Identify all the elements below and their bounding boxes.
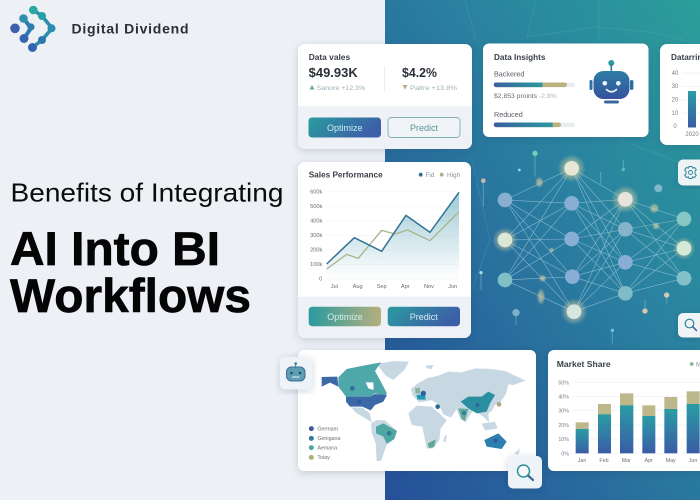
line chart: 0 [319, 277, 322, 283]
bar chart: 20 [672, 98, 679, 104]
bar chart: 30 [672, 84, 679, 90]
stacked bar chart: 50% [558, 380, 569, 386]
stacked bar chart: Jun [689, 458, 697, 464]
button: optimize: Optimize [327, 312, 363, 322]
bar chart: 0 [673, 124, 677, 130]
metric: percentage [402, 66, 457, 92]
progress: backered: Backered [494, 70, 524, 78]
stacked bar chart: Jan [578, 458, 586, 464]
chart legend: High [447, 172, 461, 179]
line chart [310, 189, 459, 290]
line chart: Jun [448, 284, 457, 290]
chart legend: Fid [426, 172, 435, 179]
stacked bar chart: 10% [558, 437, 569, 443]
progress: reduced [494, 110, 575, 127]
icon: gear card [678, 160, 700, 186]
heading: main title [10, 222, 251, 322]
panel: world map [298, 350, 536, 471]
heading: main title: Workflows [10, 269, 251, 322]
panel: data insights [483, 44, 648, 137]
button: predict [388, 118, 460, 138]
chart legend [690, 361, 700, 368]
stacked bar chart: Apr [645, 458, 653, 464]
panel: data timeline [660, 44, 700, 145]
floating particles [479, 151, 669, 343]
stacked bar chart [558, 380, 700, 464]
line chart: 200k [310, 248, 323, 254]
highlighted countries [322, 362, 507, 449]
stacked bar chart: 30% [558, 409, 569, 415]
button: predict: Predict [410, 123, 439, 133]
chart legend [419, 172, 461, 179]
panel: market share [548, 350, 700, 471]
map legend: Aemana [317, 445, 337, 451]
stacked bar chart: Feb [599, 458, 609, 464]
button: predict: Predict [410, 312, 438, 322]
stacked bar chart: Mar [622, 458, 631, 464]
metric: sales value [309, 66, 365, 92]
bar chart: 2020 [685, 132, 699, 138]
progress: backered: $2,853 proints -2.8% [494, 93, 557, 100]
line chart: 500k [310, 204, 323, 210]
logo [10, 6, 189, 52]
line chart: 600k [310, 189, 323, 195]
line chart: 400k [310, 218, 323, 224]
icon: robot card [280, 357, 312, 390]
world map [309, 361, 526, 461]
icon: magnifier card [508, 456, 542, 488]
metric: sales value: $49.93K [309, 66, 358, 80]
progress: backered [494, 70, 575, 100]
background: light left side [0, 0, 385, 500]
neural network [479, 151, 695, 343]
line chart: Nov [424, 284, 434, 290]
button: optimize [309, 307, 381, 326]
network nodes [492, 154, 695, 325]
metric: percentage: Paitre +13.8% [410, 85, 457, 92]
panel title: Sales Performance [309, 170, 383, 180]
button: predict [388, 307, 460, 326]
panel title: Market Share [557, 359, 611, 369]
background: blue-teal right side [385, 0, 700, 500]
map legend: Germam [317, 426, 339, 432]
panel title: Data Insights [494, 53, 546, 62]
logo mark [10, 6, 55, 52]
panel: sales performance [298, 162, 471, 338]
line chart: Apr [401, 284, 410, 290]
continents [351, 361, 526, 461]
bar chart: 10 [672, 111, 679, 117]
panel: data values [298, 44, 472, 149]
progress: reduced: Reduced [494, 110, 523, 119]
icon: robot [590, 60, 633, 104]
heading: main title: AI Into BI [10, 222, 220, 275]
stacked bar chart: 0% [561, 451, 569, 457]
metric: percentage: $4.2% [402, 66, 437, 80]
icon: search card [678, 313, 700, 338]
logo wordmark: Digital Dividend [72, 20, 188, 36]
stacked bar chart: 20% [558, 423, 569, 429]
line chart: 300k [310, 233, 323, 239]
line chart: Sep [377, 284, 387, 290]
panel title: Data vales [309, 52, 350, 62]
metric: sales value: Sanore +12.3% [317, 85, 365, 92]
stacked bar chart: 40% [558, 395, 569, 401]
map legend: Genigana [317, 436, 340, 442]
heading: subtitle: Benefits of Integrating [10, 178, 284, 208]
bar chart [672, 71, 700, 138]
line chart: Aug [353, 284, 363, 290]
button: optimize: Optimize [327, 123, 362, 133]
stacked bar chart: May [666, 458, 676, 464]
map legend [309, 426, 340, 461]
line chart: Jul [331, 284, 338, 290]
button: optimize [308, 118, 381, 138]
bar chart: 40 [672, 71, 679, 77]
map legend: Toiay [317, 455, 330, 461]
line chart: 100k [310, 262, 323, 268]
network connections [505, 168, 684, 312]
